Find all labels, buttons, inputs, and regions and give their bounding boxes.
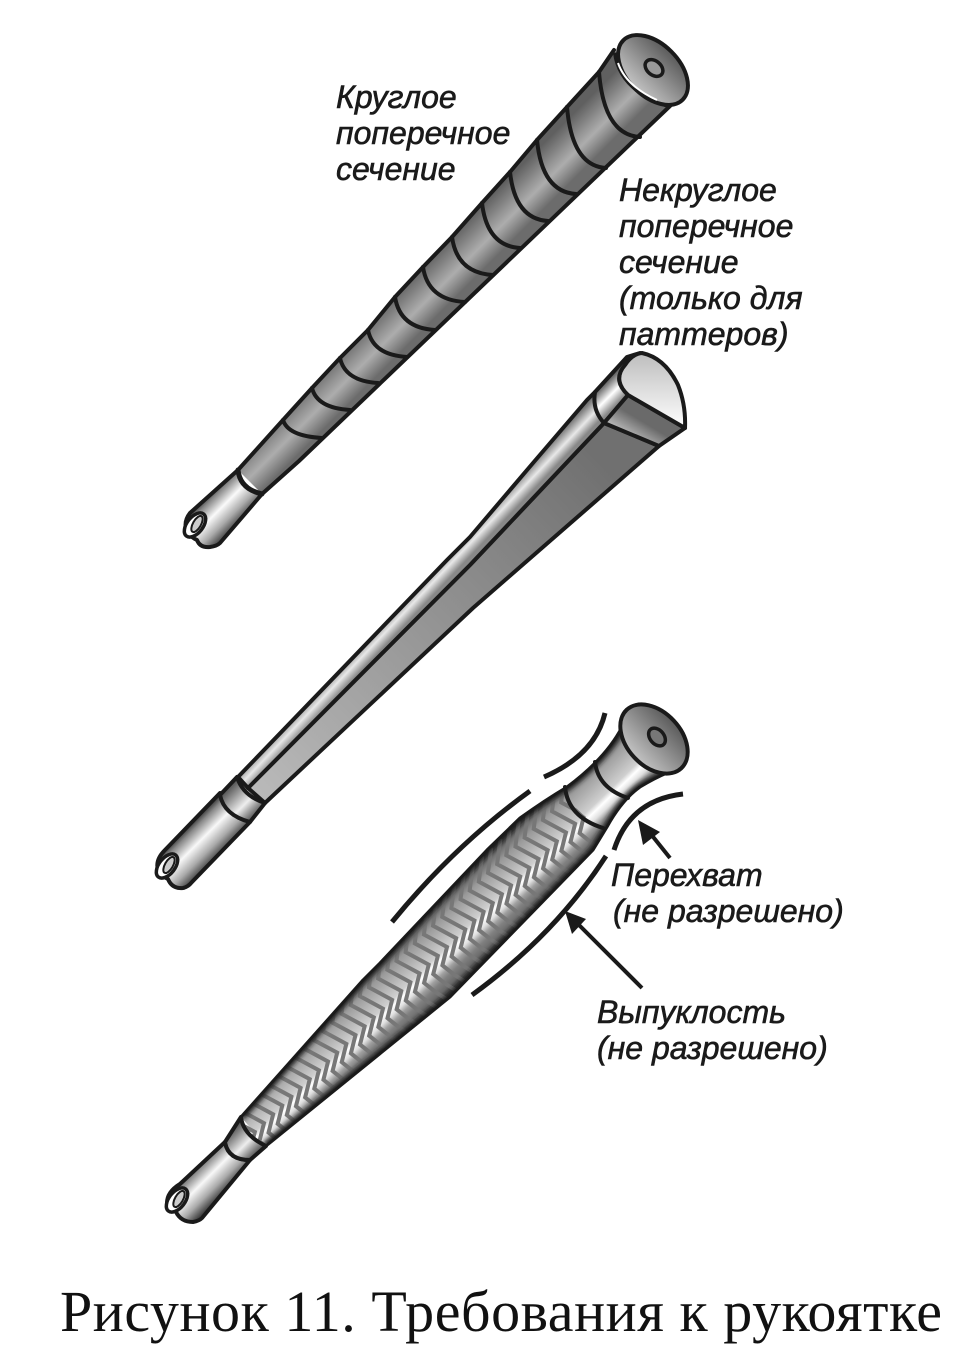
label: round cross-section: Круглое	[336, 79, 457, 115]
label: non-round cross-section: Некруглое	[619, 172, 777, 208]
label: round cross-section: сечение	[336, 151, 456, 187]
figure caption: Рисунок 11. Требования к рукоятке	[60, 1279, 942, 1344]
grip 2 flat face	[248, 423, 659, 803]
label: non-round cross-section: сечение	[619, 244, 739, 280]
grip 3 herringbone pattern	[245, 794, 590, 1143]
grip 3 body	[241, 727, 667, 1146]
label: non-round cross-section: поперечное	[619, 208, 793, 244]
arrow: to bulge	[565, 911, 642, 988]
grip 2: non-round putter grip	[152, 353, 685, 888]
grip 3 tip opening	[162, 1184, 192, 1216]
grip 1: round cross-section	[180, 22, 701, 547]
label: waist not allowed: (не разрешено)	[613, 893, 844, 929]
grip 3 metal tip	[167, 1142, 250, 1222]
grip 1 collar highlight	[618, 63, 657, 100]
grip 3 outline	[241, 727, 667, 1146]
grip 3 neck rings	[565, 762, 628, 828]
grip 3 collar ring	[225, 1117, 266, 1160]
grip 3: waisted and bulged grip	[162, 691, 701, 1222]
bracket arcs around grip 3	[392, 713, 683, 995]
grip 2 lower face band	[604, 395, 685, 446]
label: waist not allowed: Перехват	[611, 857, 763, 893]
grip 2 tip opening	[152, 850, 182, 882]
grip 2 rounded side	[238, 392, 604, 788]
grip 2 D-shaped cap	[619, 353, 685, 428]
arrow: to waist	[638, 820, 670, 858]
label: non-round cross-section: (только для	[619, 280, 803, 316]
grip 1 outline	[238, 50, 670, 494]
grip 1 metal tip	[186, 470, 262, 547]
grip 1 tip band arc	[238, 470, 262, 494]
label: non-round cross-section: паттеров)	[619, 316, 788, 352]
grip 3 end cap	[607, 691, 701, 787]
grip 1 tip opening	[180, 509, 210, 541]
grip 2 collar end	[594, 353, 640, 423]
grip 1 cap hole	[642, 56, 666, 80]
grip 1 collar	[615, 53, 668, 106]
grip 2 metal tip	[157, 793, 250, 888]
label: round cross-section: поперечное	[336, 115, 510, 151]
grip 3 edge shading	[241, 727, 667, 1146]
label: bulge not allowed: (не разрешено)	[597, 1030, 828, 1066]
grip 2 collar ring	[220, 777, 265, 822]
grip 3 cap hole	[645, 725, 669, 749]
grip 1 ribs	[283, 72, 640, 438]
grip 1 ribbed body	[238, 50, 670, 494]
label: bulge not allowed: Выпуклость	[597, 994, 786, 1030]
grip 1 end cap	[605, 22, 701, 118]
